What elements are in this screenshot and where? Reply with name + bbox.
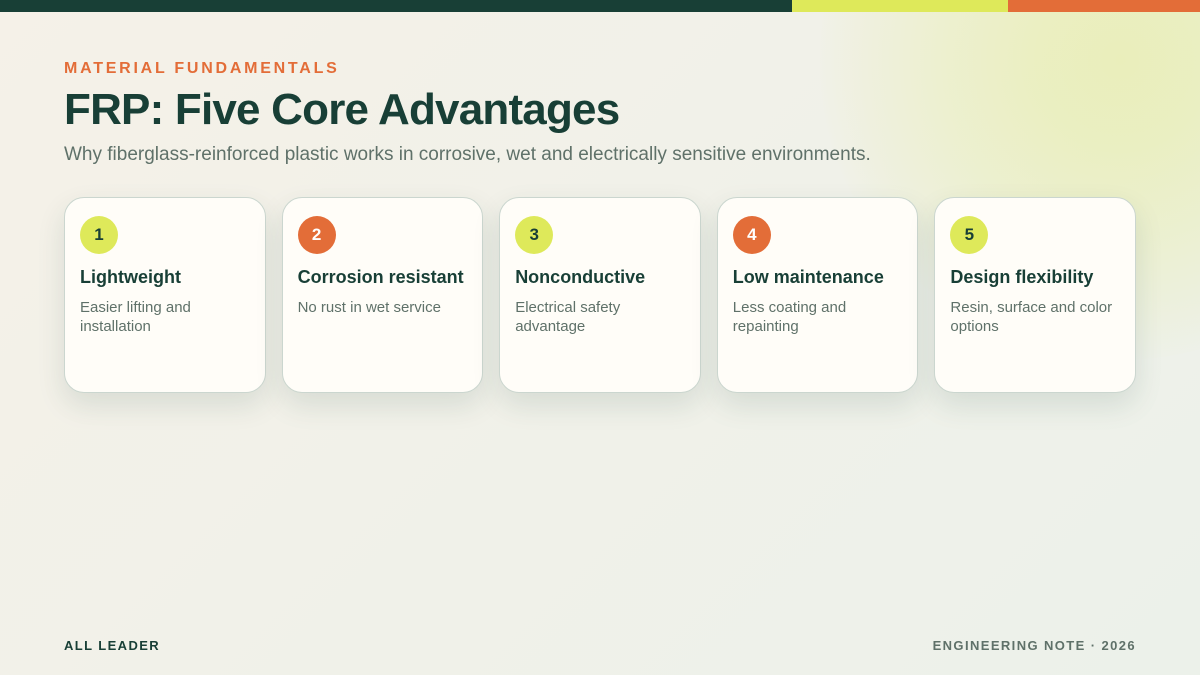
- panel: card 1 Lightweight: [64, 197, 266, 393]
- card description: Less coating and repainting: [733, 298, 846, 334]
- card description: Easier lifting and installation: [80, 298, 191, 334]
- badge: number 5: 5: [965, 225, 974, 244]
- title: FRP: Five Core Advantages: [64, 85, 619, 134]
- eyebrow heading: MATERIAL FUNDAMENTALS: [64, 60, 340, 77]
- subtitle: Why fiberglass-reinforced plastic works in corrosive, wet and electrically sensitive environments.: [64, 144, 871, 164]
- card heading: Nonconductive: [515, 267, 645, 287]
- top bar: orange segment: [1008, 0, 1200, 12]
- badge: number 4: [733, 216, 771, 254]
- badge: number 3: 3: [529, 225, 539, 244]
- badge: number 1: 1: [94, 225, 104, 244]
- panel: card 4 Low maintenance: [717, 197, 918, 393]
- top bar: yellow segment: [792, 0, 1008, 12]
- card heading: Lightweight: [80, 267, 181, 287]
- panel: card 3 Nonconductive: [499, 197, 701, 393]
- badge: number 2: 2: [312, 225, 321, 244]
- footer: note and year: ENGINEERING NOTE · 2026: [933, 638, 1136, 653]
- card heading: Corrosion resistant: [298, 267, 464, 287]
- card description: No rust in wet service: [298, 298, 441, 316]
- badge: number 2: [298, 216, 336, 254]
- card heading: Design flexibility: [950, 267, 1093, 287]
- badge: number 4: 4: [747, 225, 757, 244]
- card description: Resin, surface and color options: [950, 298, 1112, 334]
- card description: Electrical safety advantage: [515, 298, 620, 334]
- panel: card 5 Design flexibility: [934, 197, 1136, 393]
- badge: number 5: [950, 216, 988, 254]
- badge: number 3: [515, 216, 553, 254]
- badge: number 1: [80, 216, 118, 254]
- card heading: Low maintenance: [733, 267, 884, 287]
- footer: brand: ALL LEADER: [64, 638, 160, 653]
- top bar: dark green segment: [0, 0, 792, 12]
- panel: card 2 Corrosion resistant: [282, 197, 483, 393]
